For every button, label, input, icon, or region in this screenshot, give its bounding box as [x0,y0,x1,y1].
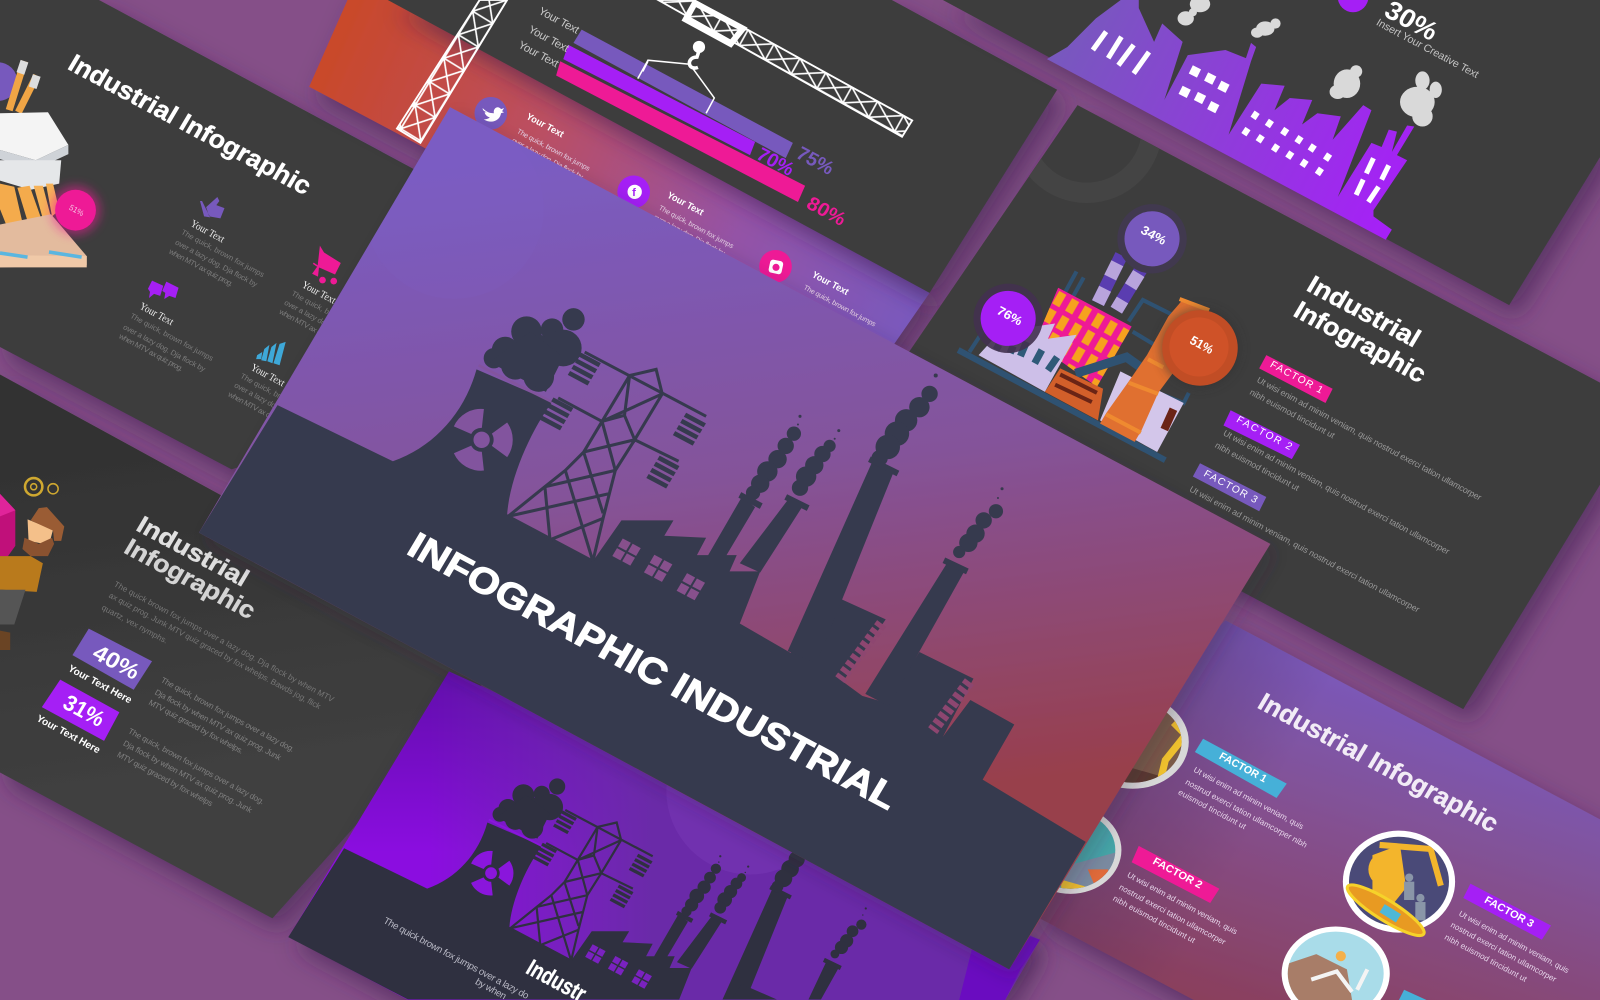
crane truss: jib [658,0,912,137]
factor 1: Ut wisi enim ad minim veniam, quis nostrud exerci tation ullamcorper [1255,375,1484,502]
text block: chart item: The quick, brown fox jumps [239,372,325,423]
factor 4 tag [1399,990,1427,1000]
text block: speech item: The quick, brown fox jumps [129,311,215,363]
factor 2 [1111,846,1239,947]
stat circle: 51% [1160,308,1240,388]
text block: facebook: The quick, brown fox jumps [657,204,735,250]
text block: cart item: when MTV ax quiz prog. [277,307,345,349]
stat: 30%: Insert Your Creative Text [1374,17,1481,81]
isometric factory illustration [0,61,87,267]
factory windows [1093,32,1389,202]
text block: 40% description: Dja flock by when MTV ax quiz prog. Junk [153,688,284,763]
panel: crane bar chart slide [388,0,1057,293]
icon: facebook [617,176,650,208]
factor 3: Ut wisi enim ad minim veniam, quis nostrud exerci tation ullamcorper [1188,484,1422,614]
factor 2: Ut wisi enim ad minim veniam, quis nostrud exerci tation ullamcorper [1221,428,1452,556]
text block: chart item [226,362,325,432]
panel: right factory statistics slide [878,62,1600,709]
smoke clouds [1178,0,1442,127]
text block: thumb item [166,218,266,289]
silhouette: small industrial skyline [288,778,867,1000]
stat: 40%: 40% [88,640,144,684]
value: 75%: 75% [792,143,838,180]
text block: facebook [652,190,735,258]
text block: cart item: The quick, brown fox jumps [290,289,376,340]
text block: thumb item: over a lazy dog. Dja flock by [173,238,259,289]
icon: bar chart [256,342,286,365]
stat circle: 34% [1117,204,1187,273]
factor 1: Ut wisi enim ad minim veniam, quis [1192,765,1305,831]
panel: top-left dark slide with isometric factory [0,0,694,469]
text block: cart item [277,279,376,349]
illustration circle: mining [1281,923,1393,1000]
crane truss: mast [397,0,507,143]
stat circle: 34%: 34% [1138,222,1169,248]
panel: bottom purple slide [288,671,1040,1000]
badge: 51%: 51% [67,203,85,218]
illustration circle: robotic arm [1120,707,1189,789]
text block: thumb item: when MTV ax quiz prog. [166,247,235,288]
stat: 31%: Your Text Here [34,714,102,756]
text block: chart item: Your Text [248,362,287,389]
text block: 31% description: Dja flock by when MTV ax quiz prog. Junk [121,739,255,815]
stat: 40% [66,629,152,706]
heading: Industrial Infographic: Industrial [132,512,253,592]
factor 1: nostrud exerci tation ullamcorper nibh [1184,778,1309,850]
silhouette: industrial skyline [199,308,1086,969]
factor 3: nostrud exerci tation ullamcorper [1449,921,1558,984]
factor 3: Ut wisi enim ad minim veniam, quis [1457,909,1571,975]
icon: speech bubbles [148,281,179,299]
illustration: bearded man with gem and gears [0,478,64,650]
factor 1: nibh euismod tincidunt ut [1248,387,1337,440]
text block: 31% description: The quick, brown fox jumps over a lazy dog. [127,727,266,806]
badge: 51% [51,186,100,235]
stat circle: 76%: 76% [994,303,1025,328]
factor 3: FACTOR 3 [1202,469,1260,506]
panel: main slide [199,107,1270,969]
factor 2: nostrud exerci tation ullamcorper [1117,883,1227,947]
illustration circle: robot factory [1342,831,1455,943]
value: 70%: 70% [753,144,798,181]
factor 1: FACTOR 1 [1217,750,1269,785]
heading: Industrial Infographic: Industrial Infographic [1253,688,1503,838]
text block: speech item: Your Text [137,300,176,328]
bar labels: Your Text [516,39,561,71]
bar labels: Your Text [536,6,582,37]
heading: Industrial Infographic: Infographic [1289,296,1431,389]
stat circle: 76% [973,284,1043,353]
icon: shopping cart [313,248,340,284]
factory illustration [958,255,1209,460]
icon: twitter [474,97,507,130]
factor 2: Ut wisi enim ad minim veniam, quis [1126,871,1239,936]
panel: gradient social media slide [309,0,930,383]
text block: small slide description: The quick brown fox jumps over a lazy do [381,916,531,1000]
factor 3: FACTOR 3 [1482,894,1536,930]
text block: cart item: over a lazy dog. Dja flock by [283,298,368,349]
stat: 40%: Your Text Here [66,664,134,706]
text block: chart item: over a lazy dog. Dja flock by [233,381,318,432]
panel: bottom-right factors slide [1019,620,1600,1000]
text block: instagram: Your Text [810,270,851,298]
text block: twitter: over a lazy dog. Dja flock by [510,137,585,181]
text block: instagram: The quick, brown fox jumps [802,284,878,329]
factor 1: euismod tincidunt ut [1177,788,1248,831]
illustration circle: truck [1056,816,1122,894]
factory skyline [1047,0,1414,240]
text block: twitter: The quick, brown fox jumps [515,127,592,173]
panel: top-right factory skyline slide [943,0,1600,305]
text block: intro: quartz, vex nymphs. [100,603,169,645]
text block: intro: ax quiz prog. Junk MTV quiz graced by fox whelps. Bawds jog, flick [107,591,323,711]
factor 3 [1443,884,1571,984]
factor 1 [1177,739,1309,850]
text block: facebook: over a lazy dog. Dja flock by [652,213,727,258]
text block: speech item: over a lazy dog. Dja flock by [121,323,207,374]
text block: chart item: when MTV ax quiz prog. [226,389,294,431]
heading: Industrial Infographic: Industrial [1302,271,1425,353]
text block: thumb item: The quick, brown fox jumps [180,228,266,279]
factor 2: nibh euismod tincidunt ut [1213,440,1302,493]
bar labels [516,6,582,71]
heading: Industrial Infographic: Industrial Infographic [63,49,316,201]
text block: cart item: Your Text [299,279,338,307]
icon: thumbs up [200,197,224,218]
panel: bottom-left percentages slide [0,374,510,918]
crane hook and slings [638,3,743,113]
text block: 31% description: MTV quiz graced by fox whelps [115,750,214,808]
text block: thumb item: Your Text [188,218,227,245]
stat: 30% [1338,0,1481,81]
bar labels: Your Text [526,24,572,55]
stat circle: 51%: 51% [1187,333,1217,357]
value: 80%: 80% [803,193,850,231]
factor 2: FACTOR 2 [1234,415,1294,453]
icon: facebook: f [632,187,636,199]
factor 2: nibh euismod tincidunt ut [1111,894,1197,945]
stat: 31%: 31% [59,690,109,732]
icon: instagram [759,250,792,283]
factor 1: FACTOR 1 [1268,359,1325,396]
factor 2: FACTOR 2 [1151,856,1204,891]
text block: speech item: when MTV ax quiz prog. [116,331,185,373]
text block: intro: The quick brown fox jumps over a lazy dog. Dja flock by when MTV [112,580,336,704]
text block: 40% description: The quick, brown fox jumps over a lazy dog. [159,676,296,754]
title: INFOGRAPHIC INDUSTRIAL [401,525,905,817]
text block: twitter [510,111,592,181]
text block: speech item [116,300,215,374]
bar chart: percentage bars [556,30,805,202]
stat: 31% [34,680,119,756]
text block: twitter: Your Text [524,111,566,140]
text block: 40% description: MTV quiz graced by fox whelps. [147,698,245,756]
heading: Industrial Infographic: Infographic [119,534,260,625]
text block: facebook: Your Text [665,190,706,219]
factor 3: nibh euismod tincidunt ut [1443,933,1529,984]
